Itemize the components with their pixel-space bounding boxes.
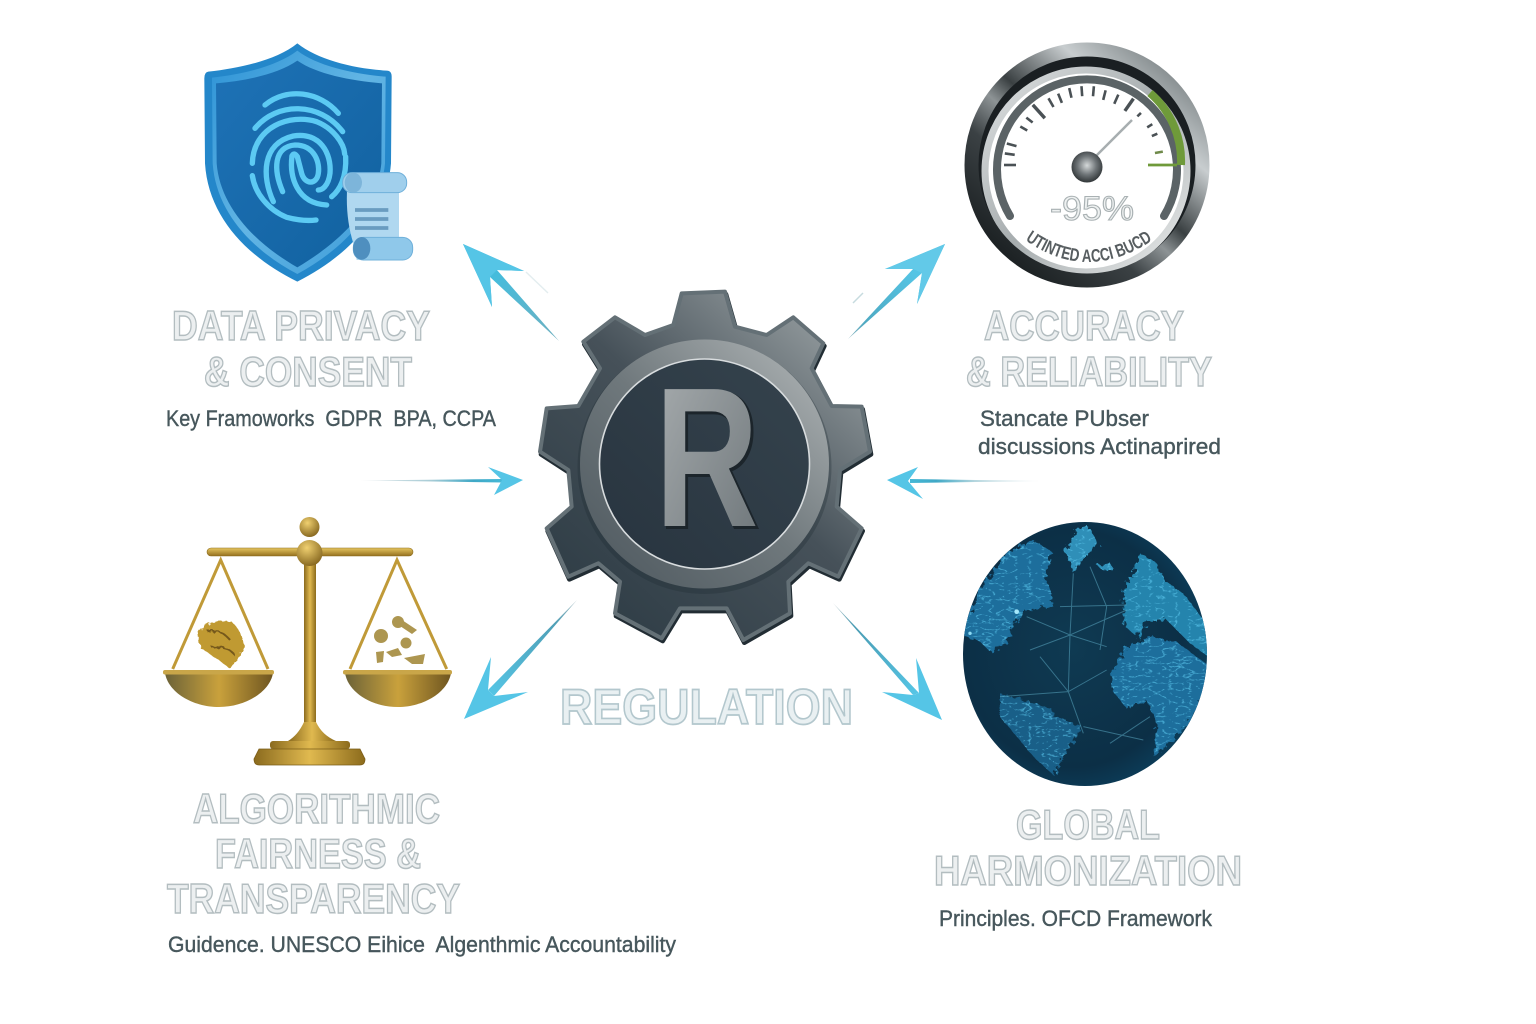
heading: algorithmic fairness and transparency (167, 785, 460, 922)
arrow: to algorithmic fairness (464, 600, 577, 719)
left pan (163, 670, 274, 707)
heading: algorithmic fairness and transparency: ALGORITHMIC (193, 785, 440, 832)
gauge hub (1072, 152, 1102, 182)
right pan (343, 670, 452, 707)
arrow: to data privacy (463, 244, 559, 341)
gauge needle (1096, 120, 1132, 156)
gauge ticks (1004, 86, 1177, 165)
heading: accuracy and reliability (966, 302, 1212, 395)
icon: central gear (540, 292, 871, 643)
scroll (343, 173, 413, 260)
gauge value: -95% (1050, 190, 1134, 228)
icon: globe (960, 522, 1210, 786)
text: accuracy description: discussions Actinaprired (978, 434, 1221, 459)
heading: data privacy and consent (172, 302, 430, 395)
gear letter: R (655, 346, 758, 568)
left pan nugget (198, 621, 244, 667)
heading: global harmonization: HARMONIZATION (934, 847, 1242, 894)
arrow: to accuracy (848, 244, 945, 339)
heading: data privacy and consent: DATA PRIVACY (172, 302, 430, 349)
icon: shield with fingerprint and scroll (204, 43, 413, 282)
arrow: from right into gear (887, 467, 1040, 499)
text: key frameworks: Key Framoworks GDPR BPA, CCPA (166, 406, 496, 431)
heading: accuracy and reliability: ACCURACY (984, 302, 1184, 349)
right pan fragments (374, 616, 425, 664)
text: accuracy description (978, 406, 1221, 459)
text: guidance: Guidence. UNESCO Eihice Algenthmic Accountability (168, 932, 676, 957)
heading: data privacy and consent: & CONSENT (204, 348, 412, 395)
gauge caption: UTINTED ACCI BUCD (1027, 230, 1150, 262)
heading: accuracy and reliability: & RELIABILITY (966, 348, 1212, 395)
icon: accuracy gauge (964, 42, 1210, 288)
heading: regulation: REGULATION (560, 679, 853, 735)
scale beam (207, 548, 413, 556)
arrow: from left into gear (360, 467, 523, 495)
network lines (1000, 567, 1150, 743)
text: accuracy description: Stancate PUbser (980, 406, 1149, 431)
scale chains (173, 560, 447, 669)
text: principles: Principles. OFCD Framework (939, 906, 1213, 931)
heading: algorithmic fairness and transparency: FAIRNESS & (215, 830, 421, 877)
scale stand (254, 560, 365, 765)
heading: algorithmic fairness and transparency: TRANSPARENCY (167, 875, 460, 922)
heading: global harmonization: GLOBAL (1016, 801, 1160, 848)
arrow: to global harmonization (833, 603, 942, 720)
heading: global harmonization (934, 801, 1242, 894)
icon: golden balance scales (163, 517, 452, 765)
gear letter: R (657, 348, 761, 570)
